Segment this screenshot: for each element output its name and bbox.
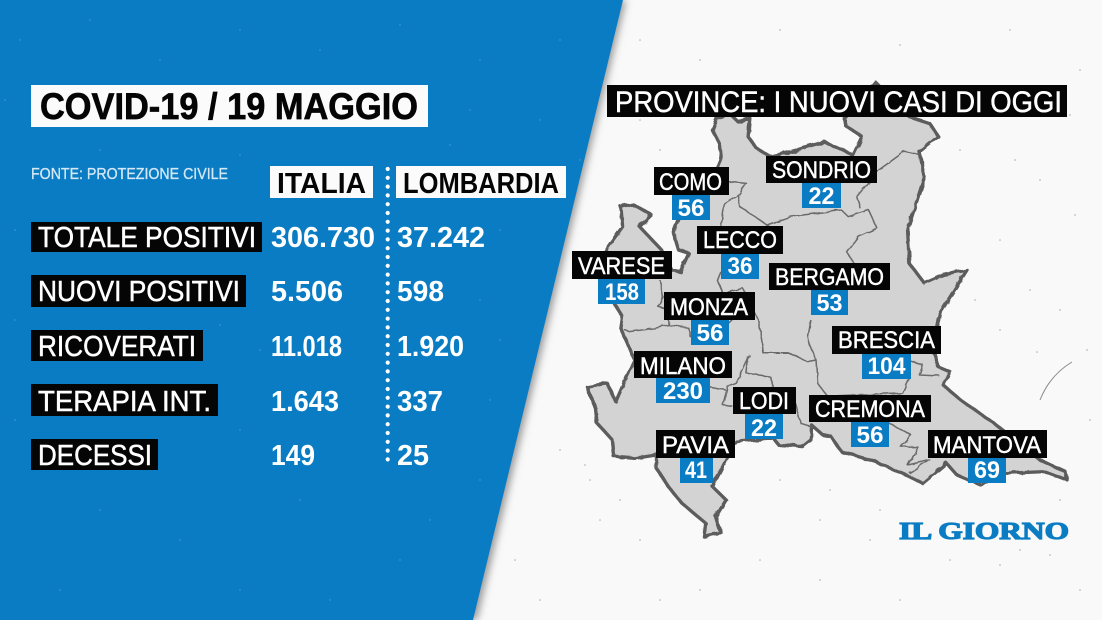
row: terapia intensiva: 1.643 (271, 386, 339, 418)
logo: Il Giorno: IL GIORNO (899, 519, 1069, 545)
province label: Bergamo: BERGAMO (775, 264, 884, 291)
heading: provinces: PROVINCE: I NUOVI CASI DI OGGI (615, 86, 1062, 119)
province label: Lodi (733, 387, 796, 442)
province label: Pavia: PAVIA (662, 432, 729, 459)
row: decessi: 25 (397, 440, 429, 472)
province label: Sondrio: 22 (808, 183, 834, 210)
map of Lombardy (587, 82, 1067, 537)
column heading: Lombardia: LOMBARDIA (403, 168, 559, 200)
province label: Lecco: LECCO (703, 227, 777, 254)
row: decessi (31, 439, 429, 472)
panel: national and regional data (0, 0, 623, 620)
province label: Monza: MONZA (670, 294, 748, 321)
province label: Varese: VARESE (578, 253, 665, 280)
row: nuovi positivi: NUOVI POSITIVI (38, 276, 240, 308)
province label: Milano: MILANO (640, 353, 726, 380)
province label: Sondrio (766, 156, 877, 210)
row: decessi: 149 (271, 440, 315, 472)
row: terapia intensiva: 337 (397, 386, 443, 418)
row: totale positivi: 306.730 (271, 222, 375, 254)
province label: Bergamo (769, 263, 890, 317)
province label: Brescia: BRESCIA (838, 327, 935, 354)
row: nuovi positivi (31, 275, 444, 308)
province label: Monza: 56 (696, 320, 724, 347)
province label: Lecco: 36 (728, 253, 752, 280)
row: totale positivi: TOTALE POSITIVI (38, 222, 256, 254)
province label: Cremona: 56 (856, 422, 884, 449)
province label: Como (654, 167, 729, 222)
province label: Varese: 158 (605, 279, 639, 306)
province label: Como: 56 (678, 195, 704, 222)
row: ricoverati: 1.920 (397, 331, 464, 363)
column heading: Italia: ITALIA (277, 168, 366, 200)
source note: FONTE: PROTEZIONE CIVILE (31, 166, 228, 183)
province label: Varese (572, 251, 672, 306)
province label: Sondrio: SONDRIO (772, 157, 871, 184)
province label: Monza (664, 292, 755, 347)
row: nuovi positivi: 5.506 (271, 276, 343, 308)
row: ricoverati: RICOVERATI (38, 331, 196, 363)
province label: Brescia: 104 (868, 353, 906, 380)
province label: Mantova: 69 (974, 457, 1000, 484)
province label: Pavia: 41 (685, 457, 707, 484)
province label: Mantova: MANTOVA (933, 432, 1041, 459)
row: ricoverati (31, 330, 464, 363)
row: totale positivi (31, 222, 485, 254)
row: nuovi positivi: 598 (397, 276, 444, 308)
province label: Milano (634, 351, 732, 405)
province label: Milano: 230 (663, 378, 703, 405)
row: terapia intensiva (31, 384, 443, 418)
province label: Mantova (928, 430, 1047, 484)
row: ricoverati: 11.018 (271, 331, 342, 363)
province label: Cremona (809, 395, 931, 449)
province label: Como: COMO (659, 169, 722, 196)
province label: Brescia (832, 326, 941, 380)
province label: Pavia (656, 430, 735, 484)
province label: Lodi: 22 (751, 415, 777, 442)
title: COVID-19 / 19 MAGGIO (40, 86, 418, 127)
row: totale positivi: 37.242 (397, 222, 485, 254)
province label: Lecco (697, 226, 783, 280)
row: terapia intensiva: TERAPIA INT. (38, 386, 211, 418)
province label: Cremona: CREMONA (815, 396, 925, 423)
row: decessi: DECESSI (38, 440, 152, 472)
province label: Lodi: LODI (739, 388, 789, 415)
blue panel shadow (0, 0, 626, 620)
province label: Bergamo: 53 (816, 290, 842, 317)
